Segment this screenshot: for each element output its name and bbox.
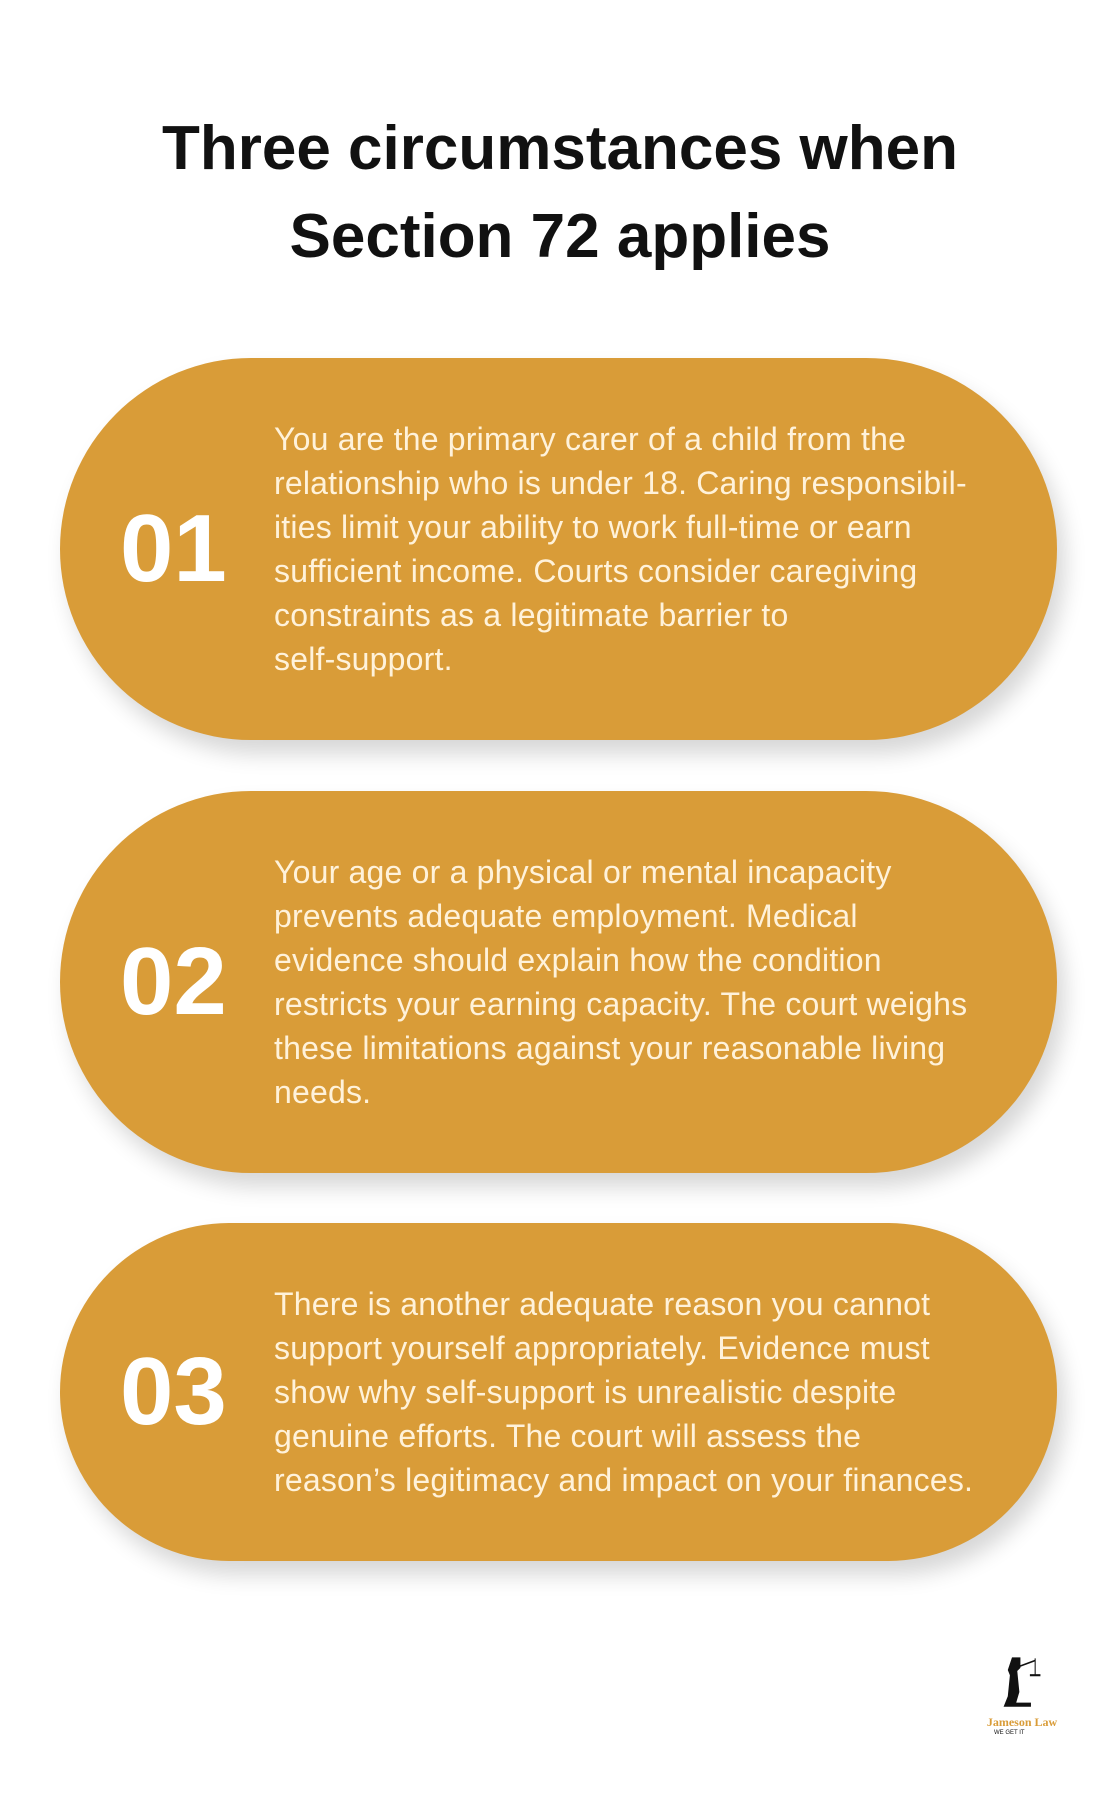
text block 01: self-support. [274,641,453,677]
text block 01: relationship who is under 18. Caring responsibil- [274,465,967,501]
text block 03 [274,1286,973,1498]
number 01: 01 [120,495,227,602]
text block 02: restricts your earning capacity. The court weighs [274,986,967,1022]
text block 02: evidence should explain how the condition [274,942,882,978]
title [162,114,958,271]
logo: Jameson Law [987,1657,1058,1736]
text block 01: ities limit your ability to work full-time or earn [274,509,912,545]
text block 01: You are the primary carer of a child from the [274,421,906,457]
panel: circumstance 01 [60,358,1057,740]
text block 01: constraints as a legitimate barrier to [274,597,788,633]
panel: circumstance 03 [60,1223,1057,1561]
title: Three circumstances when [162,114,958,183]
text block 03: show why self-support is unrealistic despite [274,1374,896,1410]
text block 03: There is another adequate reason you cannot [274,1286,930,1322]
text block 02: these limitations against your reasonable living [274,1030,945,1066]
logo: Jameson Law: Jameson Law [987,1715,1057,1729]
text block 01: sufficient income. Courts consider caregiving [274,553,917,589]
number 02: 02 [120,928,227,1035]
text block 02 [274,854,967,1110]
panel: circumstance 02 [60,791,1057,1173]
text block 03: genuine efforts. The court will assess the [274,1418,861,1454]
text block 02: Your age or a physical or mental incapacity [274,854,892,890]
logo: Jameson Law: WE GET IT [994,1730,1025,1736]
number 03: 03 [120,1338,227,1445]
text block 03: reason’s legitimacy and impact on your finances. [274,1462,973,1498]
title: Section 72 applies [290,202,830,271]
text block 02: prevents adequate employment. Medical [274,898,858,934]
text block 03: support yourself appropriately. Evidence must [274,1330,930,1366]
text block 02: needs. [274,1074,371,1110]
text block 01 [274,421,967,677]
